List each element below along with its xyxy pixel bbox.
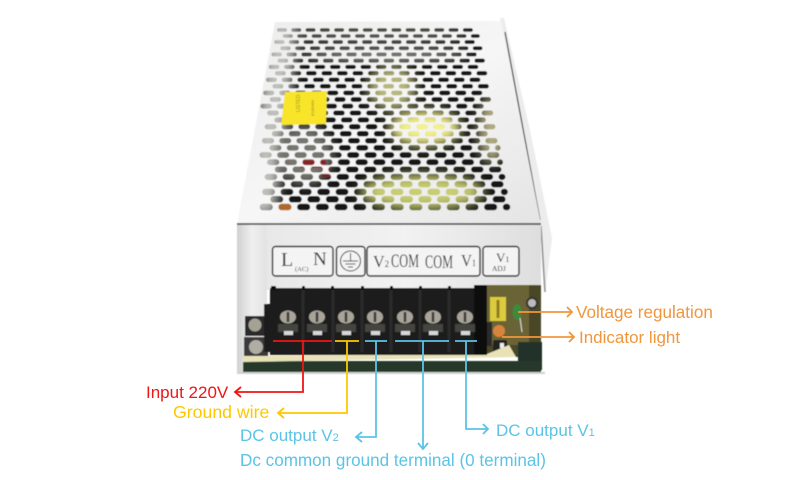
left mounting flange <box>237 224 267 373</box>
capacitor <box>490 297 506 321</box>
label: L AC N: N <box>313 249 327 270</box>
label: V2 COM COM V1 <box>367 246 480 276</box>
black terminal block <box>264 285 492 355</box>
washers <box>278 324 475 332</box>
label: V1 ADJ: V1 <box>496 250 509 265</box>
callout: DC output V1 <box>455 341 595 440</box>
callout: input 220V <box>146 341 332 402</box>
potentiometer <box>493 325 505 337</box>
label: L AC N <box>272 246 333 276</box>
label: V2 COM COM V1: V2 <box>373 252 389 271</box>
power supply unit photo <box>230 10 552 374</box>
left mounting screws <box>244 316 268 356</box>
yellow sticker: E185454 <box>310 99 315 116</box>
lower board <box>237 345 545 374</box>
front face <box>266 224 541 290</box>
callout: indicator light: Indicator light <box>579 328 680 347</box>
callout: DC common ground terminal: Dc common ground terminal (0 terminal) <box>240 451 546 470</box>
callout: voltage regulation: Voltage regulation <box>576 303 713 322</box>
yellow sticker: LISTED <box>296 94 302 112</box>
label: L AC N: (AC) <box>295 266 308 273</box>
label: V2 COM COM V1: COM <box>391 251 419 272</box>
terminal labels <box>272 246 519 276</box>
bolt <box>527 298 537 308</box>
screws <box>280 310 473 324</box>
label: L AC N: L <box>281 249 293 271</box>
perforated top cover <box>230 10 541 224</box>
label: V1 ADJ <box>483 246 519 276</box>
yellow sticker <box>281 91 327 125</box>
label: V2 COM COM V1: V1 <box>461 251 476 270</box>
callout: ground wire: Ground wire <box>173 402 270 422</box>
callout: DC output V2 <box>240 341 387 445</box>
callout: DC output V1: DC output V1 <box>496 421 595 440</box>
PCB corner with components <box>487 285 542 370</box>
label: V2 COM COM V1: COM <box>425 252 453 273</box>
label: earth symbol <box>336 246 365 276</box>
label: V1 ADJ: ADJ <box>492 264 506 273</box>
LED <box>512 304 522 320</box>
callout: input 220V: Input 220V <box>146 383 229 402</box>
callout: ground wire <box>173 341 359 422</box>
callout: DC common ground terminal <box>240 341 546 470</box>
callout: indicator light <box>502 328 680 347</box>
right side wall <box>500 18 552 295</box>
callout: DC output V2: DC output V2 <box>240 426 339 445</box>
